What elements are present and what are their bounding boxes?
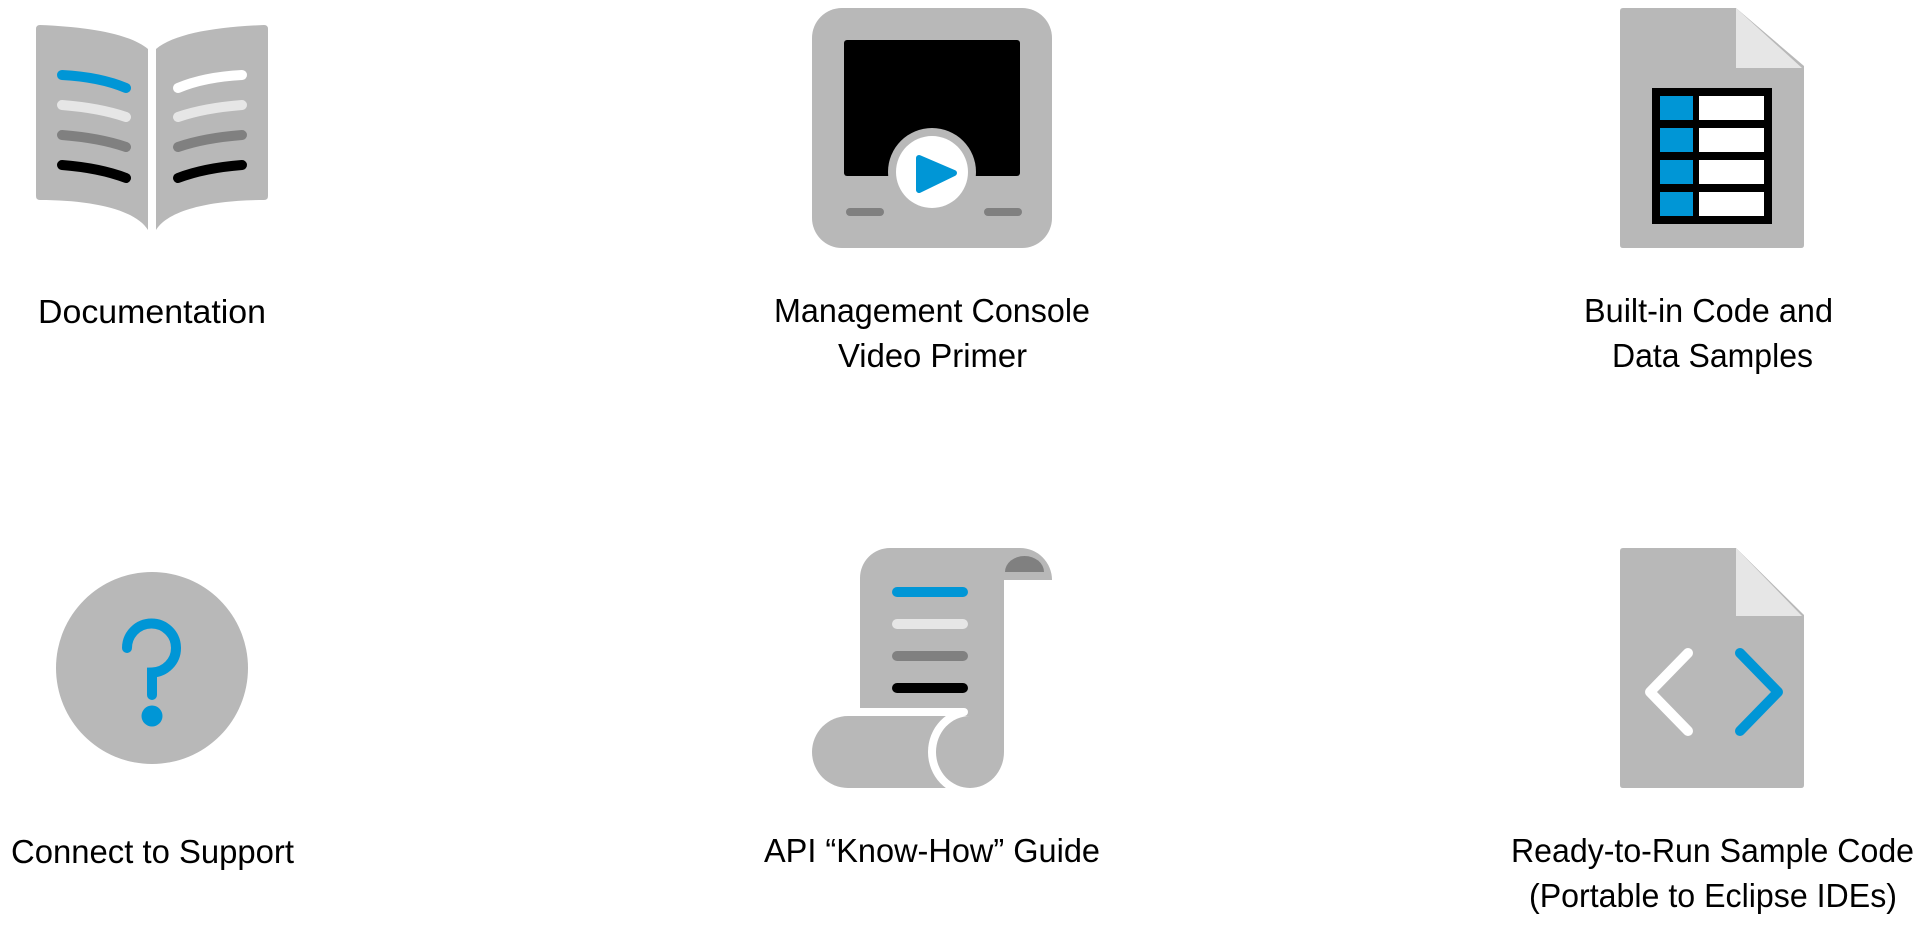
- panel: management console video primer: [774, 8, 1090, 375]
- label: built-in code and data samples: Data Samples: [1612, 338, 1813, 375]
- icon: video console: [812, 8, 1052, 248]
- icon: document with code brackets: [1620, 548, 1804, 788]
- panel: connect to support: [11, 572, 295, 871]
- label: connect to support: Connect to Support: [11, 834, 295, 871]
- panel: ready-to-run sample code: [1511, 548, 1914, 915]
- label: ready-to-run sample code: [1511, 833, 1914, 915]
- panel: built-in code and data samples: [1584, 8, 1833, 375]
- label: api know-how guide: API “Know-How” Guide: [764, 833, 1100, 870]
- label: built-in code and data samples: [1584, 293, 1833, 375]
- icon: document with table: [1620, 8, 1804, 248]
- icon: question mark circle: [56, 572, 248, 764]
- label: management console video primer: Video Primer: [838, 338, 1027, 375]
- panel: api know-how guide: [764, 548, 1100, 870]
- icon: open book: [36, 25, 268, 230]
- icon: scroll: [812, 548, 1052, 796]
- label: management console video primer: [774, 293, 1090, 375]
- label: ready-to-run sample code: Ready-to-Run Sample Code: [1511, 833, 1914, 870]
- label: management console video primer: Management Console: [774, 293, 1090, 330]
- label: ready-to-run sample code: (Portable to Eclipse IDEs): [1529, 878, 1897, 915]
- label: built-in code and data samples: Built-in Code and: [1584, 293, 1833, 330]
- label: documentation: Documentation: [38, 294, 266, 331]
- panel: documentation: [36, 25, 268, 331]
